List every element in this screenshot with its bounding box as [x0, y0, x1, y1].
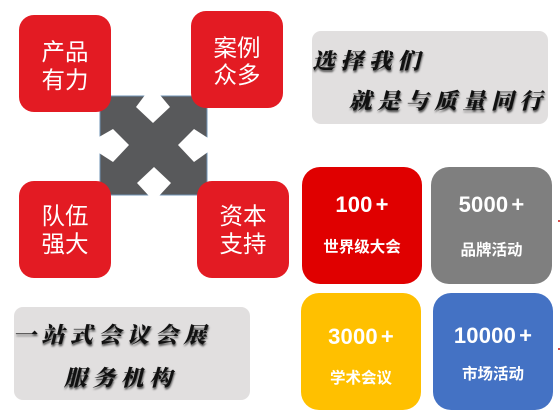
- stat card: 3000+ 学术会议: [301, 293, 421, 410]
- card: 资本支持: 资本: [220, 203, 266, 229]
- center cross graphic: [100, 96, 208, 196]
- stat card: 10000+ 市场活动: 市场活动: [462, 366, 524, 383]
- slogan panel: 选择我们 就是与质量同行: 选择我们: [310, 44, 432, 75]
- stat card: 10000+ 市场活动: [433, 293, 553, 410]
- stat card: 100+ 世界级大会: 100+: [335, 192, 389, 217]
- card: 产品有力: 产品: [42, 39, 88, 65]
- card: 案例众多: [191, 11, 283, 108]
- card: 队伍强大: [19, 181, 111, 278]
- edge mark lower: [558, 348, 560, 350]
- stat card: 5000+ 品牌活动: [431, 167, 552, 284]
- slogan panel: 选择我们 就是与质量同行: 就是与质量同行: [347, 84, 554, 115]
- card: 案例众多: 案例: [214, 35, 260, 61]
- card: 案例众多: 众多: [214, 62, 260, 88]
- card: 队伍强大: 队伍: [42, 203, 88, 229]
- edge mark upper: [558, 220, 560, 222]
- card: 产品有力: 有力: [42, 67, 88, 93]
- stat card: 10000+ 市场活动: 10000+: [454, 323, 532, 348]
- stat card: 5000+ 品牌活动: 品牌活动: [460, 242, 522, 259]
- slogan panel: 选择我们 就是与质量同行: [312, 31, 548, 124]
- card: 队伍强大: 强大: [42, 231, 88, 257]
- stat card: 100+ 世界级大会: 世界级大会: [323, 239, 401, 256]
- card: 资本支持: 支持: [220, 231, 266, 257]
- slogan panel: 一站式会议会展 服务机构: 一站式会议会展: [11, 318, 218, 349]
- slogan panel: 一站式会议会展 服务机构: 服务机构: [62, 361, 184, 392]
- stat card: 100+ 世界级大会: [302, 167, 422, 284]
- slogan panel: 一站式会议会展 服务机构: [14, 307, 250, 400]
- stat card: 3000+ 学术会议: 学术会议: [330, 370, 392, 387]
- card: 资本支持: [197, 181, 289, 278]
- stat card: 3000+ 学术会议: 3000+: [328, 324, 394, 349]
- stat card: 5000+ 品牌活动: 5000+: [459, 192, 524, 217]
- card: 产品有力: [19, 15, 111, 112]
